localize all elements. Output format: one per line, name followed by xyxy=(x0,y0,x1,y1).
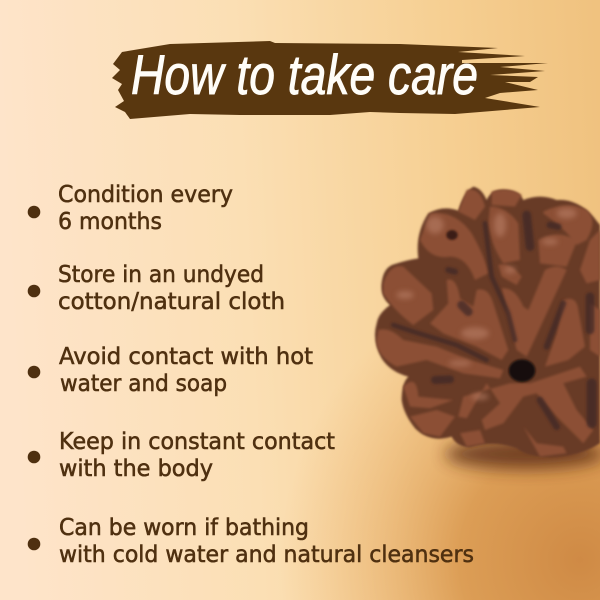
bullet xyxy=(28,451,40,463)
bead highlights xyxy=(396,208,577,400)
bead xyxy=(375,187,600,469)
list item 3 xyxy=(28,344,313,397)
bead shadow xyxy=(445,439,600,469)
bullet xyxy=(28,206,40,218)
list item 2 xyxy=(28,262,285,315)
item line 2: with cold water and natural cleansers xyxy=(59,542,474,568)
bullet xyxy=(28,538,40,550)
list item 4 xyxy=(28,429,335,482)
bead crevices xyxy=(393,215,592,427)
bead small hole xyxy=(446,230,458,240)
bead ridges xyxy=(377,190,600,457)
brush stroke xyxy=(112,41,548,119)
title banner xyxy=(112,41,548,119)
item line 1: Store in an undyed xyxy=(58,262,264,288)
item line 1: Can be worn if bathing xyxy=(59,515,309,541)
bead large hole xyxy=(509,359,535,382)
item line 2: cotton/natural cloth xyxy=(58,289,285,315)
title text: How to take care xyxy=(131,43,478,106)
item line 1: Avoid contact with hot xyxy=(59,344,313,370)
list item 5 xyxy=(28,515,474,568)
bullet xyxy=(28,285,40,297)
list item 1 xyxy=(28,182,233,235)
bullet xyxy=(28,366,40,378)
item line 2: 6 months xyxy=(58,209,162,235)
bead body xyxy=(375,187,600,457)
item line 2: water and soap xyxy=(60,371,227,397)
item line 1: Condition every xyxy=(58,182,233,208)
item line 2: with the body xyxy=(59,456,213,482)
item line 1: Keep in constant contact xyxy=(59,429,335,455)
